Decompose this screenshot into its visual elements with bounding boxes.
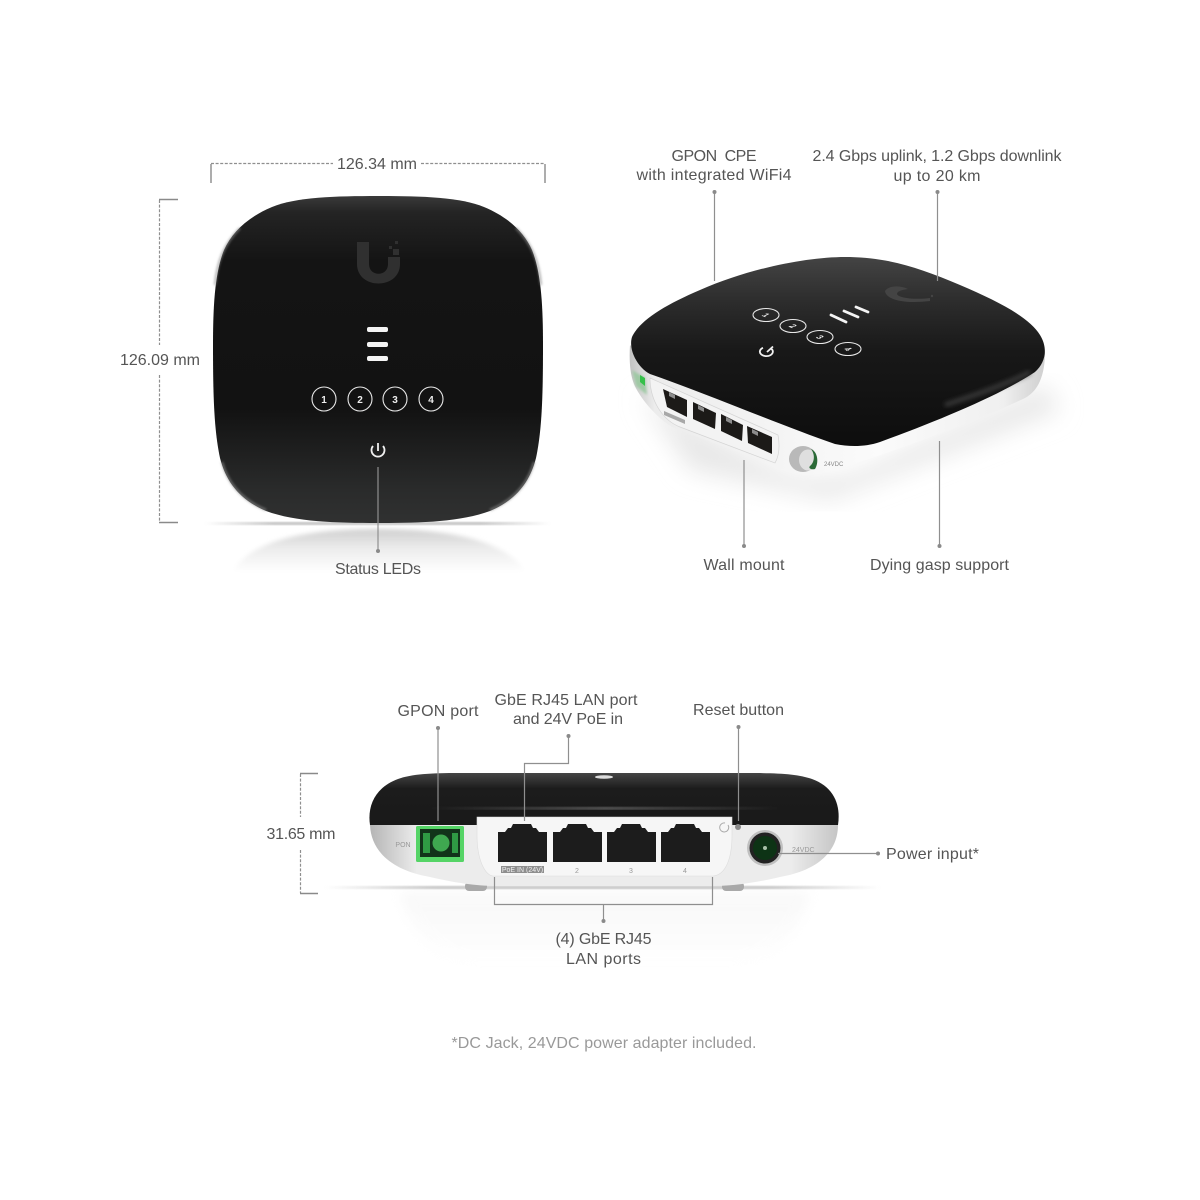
callout: reset button: Reset button <box>693 702 784 719</box>
rear port panel <box>477 817 732 876</box>
dimension: depth: 31.65 mm <box>266 826 336 843</box>
callout: RJ45 LAN and PoE: GbE RJ45 LAN port <box>494 692 638 709</box>
port LEDs 1 to 4 <box>312 387 443 411</box>
callout: speeds: up to 20 km <box>894 168 980 185</box>
rear black top <box>369 773 839 825</box>
PON label: PON <box>395 842 411 849</box>
dimension: height: 126.09 mm <box>120 352 200 369</box>
rear port labels: 3 <box>629 868 633 875</box>
callout: wall mount <box>704 460 785 574</box>
callout: LAN ports: (4) GbE RJ45 <box>556 931 652 948</box>
angled device edge highlight <box>945 372 1030 405</box>
rear port labels: PoE IN (24V) <box>502 867 543 874</box>
callout: reset button <box>693 702 784 821</box>
callout: GPON CPE: GPON CPE <box>672 148 756 165</box>
angled port LEDs: 1 <box>759 312 773 318</box>
rear port labels <box>501 866 687 875</box>
rear view device <box>325 773 880 965</box>
callout: LAN ports <box>494 877 712 968</box>
rear port labels: 2 <box>575 868 579 875</box>
callout: dying gasp <box>870 441 1010 574</box>
angled view device <box>630 257 1060 500</box>
callout: RJ45 LAN and PoE: and 24V PoE in <box>513 711 623 728</box>
callout: dying gasp: Dying gasp support <box>870 557 1010 574</box>
three LED bars <box>367 327 388 361</box>
angled device white base <box>630 345 1045 475</box>
rear port labels: 4 <box>683 868 687 875</box>
angled PoE label <box>664 411 685 424</box>
callout: GPON CPE: with integrated WiFi4 <box>636 167 792 184</box>
callout: RJ45 LAN and PoE <box>494 692 638 821</box>
rear white base <box>370 825 838 886</box>
power icon <box>372 443 384 457</box>
callout: power input <box>778 846 979 863</box>
angled port LEDs: 3 <box>813 334 827 340</box>
angled port LEDs: 2 <box>786 323 800 329</box>
angled green SC port <box>632 370 647 395</box>
callout: status LEDs: Status LEDs <box>335 561 421 578</box>
rear floor line and reflection <box>325 886 880 965</box>
footnote: *DC Jack, 24VDC power adapter included. <box>452 1035 756 1052</box>
angled power jack: 24VDC <box>824 462 844 468</box>
front view device <box>205 196 550 572</box>
callout: GPON CPE <box>636 148 792 281</box>
angled LED bars <box>831 307 868 322</box>
port LEDs 1 to 4: 4 <box>428 395 434 406</box>
angled RJ45 ports <box>663 389 772 454</box>
rear power jack <box>747 830 815 866</box>
angled port panel <box>650 378 779 463</box>
dimension: width: 126.34 mm <box>337 156 417 173</box>
logo <box>357 241 400 284</box>
angled power icon <box>760 346 773 356</box>
callout: status LEDs <box>335 467 421 578</box>
port LEDs 1 to 4: 1 <box>321 395 327 406</box>
callout: wall mount: Wall mount <box>704 557 785 574</box>
reset icon and button <box>720 823 741 832</box>
rear top power icon <box>595 775 613 779</box>
rear highlight <box>430 807 780 810</box>
front floor reflection <box>205 522 550 572</box>
rear power jack: 24VDC <box>792 847 815 854</box>
callout: speeds <box>812 148 1062 281</box>
rear feet <box>465 882 744 891</box>
callout: LAN ports: LAN ports <box>566 951 641 968</box>
angled port LEDs: 4 <box>841 346 855 352</box>
dimension: depth <box>266 774 336 894</box>
angled power jack <box>789 446 844 472</box>
callout: GPON port <box>398 703 479 821</box>
rim highlights <box>215 228 541 510</box>
green GPON port <box>416 826 464 862</box>
angled device shadow <box>640 385 1060 500</box>
callout: speeds: 2.4 Gbps uplink, 1.2 Gbps downlink <box>812 148 1062 165</box>
rear RJ45 ports <box>498 824 710 862</box>
front device body <box>213 196 543 523</box>
callout: power input: Power input* <box>886 846 979 863</box>
angled device logo <box>885 286 933 302</box>
callout: GPON port: GPON port <box>398 703 479 720</box>
angled port LEDs <box>753 308 861 356</box>
port LEDs 1 to 4: 3 <box>392 395 398 406</box>
angled device black top <box>631 257 1045 446</box>
port LEDs 1 to 4: 2 <box>357 395 363 406</box>
